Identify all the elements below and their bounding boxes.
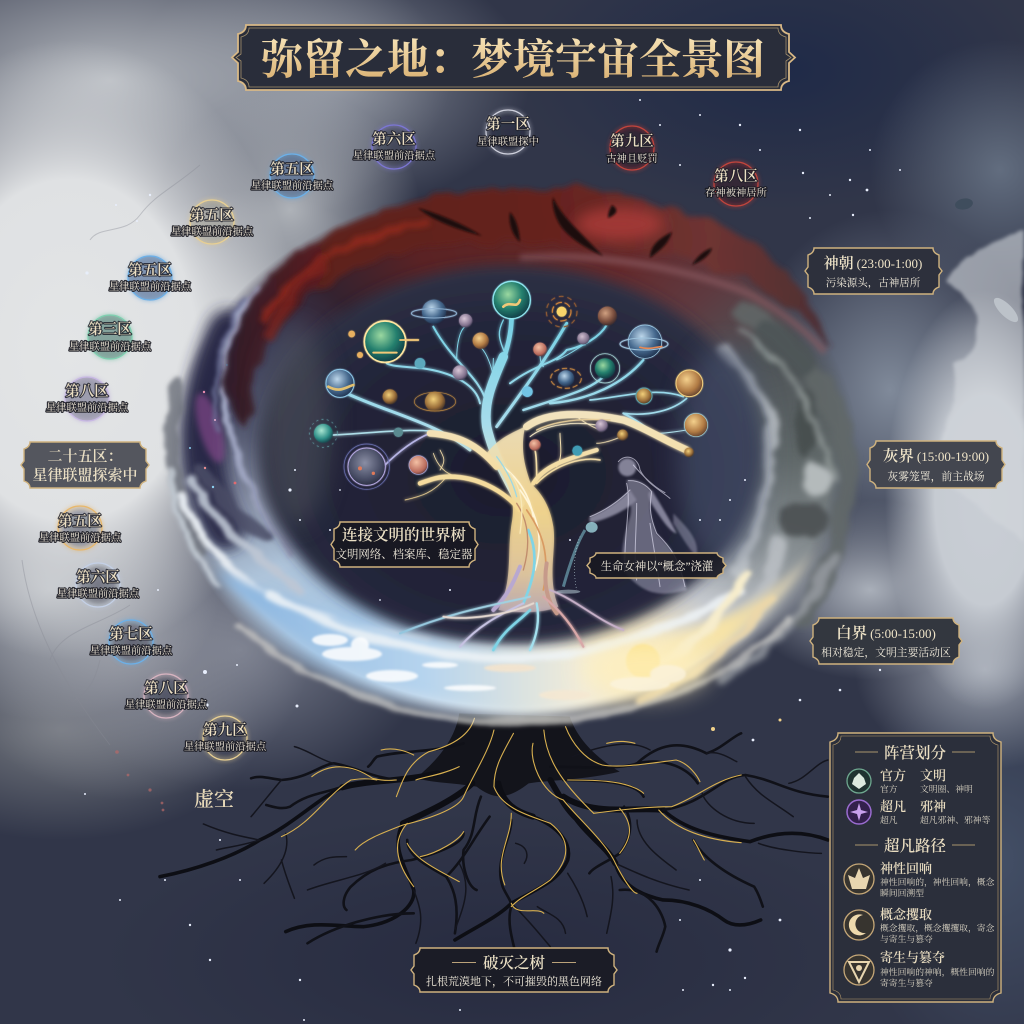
sun xyxy=(626,644,660,678)
icon: transcendent faction xyxy=(847,800,871,824)
zone marker xyxy=(69,315,152,359)
cracks in the band xyxy=(418,197,712,265)
planet xyxy=(533,343,547,356)
trunk strands xyxy=(493,419,610,613)
inner dark cosmos xyxy=(260,265,767,645)
ink wash: right light patch xyxy=(930,230,1024,540)
path: divine echo xyxy=(880,861,995,898)
zone marker xyxy=(353,125,436,169)
zone marker: 第六区 xyxy=(76,569,120,586)
zone marker: 第一区 xyxy=(486,116,530,133)
title banner: 弥留之地：梦境宇宙全景图 xyxy=(261,37,765,84)
zone marker xyxy=(109,256,192,300)
label: goddess of life: 生命女神以“概念”浇灌 xyxy=(601,559,713,573)
ring: crimson divine band xyxy=(224,189,832,430)
legend row: official: 文明圈、神明 xyxy=(920,783,973,794)
zone marker: 星律联盟前沿据点 xyxy=(57,587,140,600)
path: divine echo: 瞬间回溯型 xyxy=(880,887,924,898)
ring: dawn sky band with clouds xyxy=(215,550,815,722)
planet xyxy=(493,281,530,319)
path: concept seizing: 概念攫取 xyxy=(880,907,932,922)
root mass xyxy=(416,713,620,796)
spiral galaxy xyxy=(546,296,577,327)
legend row: official: 文明 xyxy=(920,768,946,783)
planet xyxy=(620,325,668,358)
trunk and branches: gold xyxy=(405,414,687,612)
branches: cyan xyxy=(333,313,688,503)
zone marker: 古神且贬罚 xyxy=(606,152,658,165)
planet xyxy=(409,456,428,474)
label: world tree xyxy=(331,522,478,567)
planet xyxy=(344,444,389,489)
legend row: official xyxy=(880,768,973,794)
icon: concept seizing xyxy=(844,910,874,940)
path: parasitism and usurping: 寄生与篡夺 xyxy=(880,950,945,965)
planet xyxy=(529,439,541,451)
zone marker: 第八区 xyxy=(65,383,109,400)
label: tree of destruction: 破灭之树 xyxy=(483,953,545,972)
zone marker: 星律联盟前沿据点 xyxy=(109,280,192,293)
legend row: official: 官方 xyxy=(880,783,898,794)
label: void: 虚空 xyxy=(194,788,234,811)
zone marker: 星律联盟前沿据点 xyxy=(353,149,436,162)
label: tree of destruction: 扎根荒漠地下，不可摧毁的黑色网络 xyxy=(426,974,602,988)
tree of destruction roots xyxy=(160,713,828,953)
heading: paths: 超凡路径 xyxy=(884,836,946,855)
zone marker: 第五区 xyxy=(128,262,172,279)
label: grey realm: 灰界(15:00-19:00) xyxy=(883,447,989,465)
label: world tree: 文明网络、档案库、稳定器 xyxy=(336,547,473,561)
zone marker: 星律联盟前沿据点 xyxy=(69,340,152,353)
heading: factions: 阵营划分 xyxy=(884,743,946,762)
planet xyxy=(411,300,457,324)
label: world tree: 连接文明的世界树 xyxy=(342,525,466,544)
planet xyxy=(598,307,617,325)
zone marker xyxy=(477,110,539,154)
world tree xyxy=(309,281,708,650)
label: divine dynasty xyxy=(805,248,942,294)
legend panel xyxy=(830,733,1001,1002)
tree base roots xyxy=(400,590,623,650)
path: concept seizing: 与寄生与篡夺 xyxy=(880,933,933,944)
planet xyxy=(326,369,354,397)
zone marker xyxy=(251,154,334,198)
planet xyxy=(636,388,652,404)
zone marker: 第三区 xyxy=(88,321,132,338)
label: white realm: 相对稳定，文明主要活动区 xyxy=(821,645,951,659)
planet xyxy=(522,386,533,397)
label: white realm xyxy=(810,618,962,664)
planet xyxy=(596,420,608,432)
zone marker xyxy=(171,200,254,244)
planet xyxy=(453,365,467,380)
zone marker: 第八区 xyxy=(714,168,758,185)
planets xyxy=(309,281,708,489)
planet xyxy=(684,413,708,437)
goddess hair strands and outline xyxy=(590,457,685,587)
zone marker: 星律联盟前沿据点 xyxy=(184,740,267,753)
embers xyxy=(115,750,164,811)
ring: deep space on left xyxy=(170,290,430,640)
planet xyxy=(383,389,397,404)
label: goddess of life xyxy=(587,553,726,578)
zone marker xyxy=(606,126,658,170)
planet xyxy=(572,446,582,456)
trunk body xyxy=(487,427,558,612)
zone marker: 第九区 xyxy=(203,722,247,739)
path: parasitism and usurping: 寄寄生与篡夺 xyxy=(880,977,933,988)
planet xyxy=(577,332,589,344)
zone marker: 第六区 xyxy=(372,131,416,148)
zone marker: 存神被神居所 xyxy=(705,186,767,199)
icon: parasitism and usurping xyxy=(844,955,874,985)
legend row: transcendent: 超凡 xyxy=(880,814,898,825)
path: concept seizing xyxy=(880,907,995,944)
zone marker xyxy=(57,563,140,607)
path: parasitism and usurping xyxy=(880,950,995,988)
icon: divine echo xyxy=(844,864,874,894)
zone marker: 星律联盟探中 xyxy=(477,135,539,148)
ring: day-night realm band xyxy=(175,205,842,727)
path: parasitism and usurping: 神性回响的神响，概性回响的 xyxy=(880,966,995,978)
label: grey realm: 灰雾笼罩，前主战场 xyxy=(887,469,985,483)
zone marker: 星律联盟前沿据点 xyxy=(251,179,334,192)
legend row: official: 官方 xyxy=(880,768,906,783)
planet xyxy=(676,370,703,397)
zone marker: 星律联盟前沿据点 xyxy=(125,698,208,711)
label: divine dynasty: 神朝(23:00-1:00) xyxy=(824,254,922,272)
zone marker xyxy=(125,674,208,718)
planet xyxy=(590,354,620,383)
planet xyxy=(415,358,425,369)
icon: official faction xyxy=(847,769,871,793)
zone marker: 星律联盟前沿据点 xyxy=(39,531,122,544)
path: divine echo: 神性回响的，神性回响，概念 xyxy=(880,876,995,888)
label: zone twenty-five: 二十五区： xyxy=(47,448,123,465)
label: zone twenty-five: 星律联盟探索中 xyxy=(32,466,138,484)
zone marker xyxy=(184,716,267,760)
zone marker xyxy=(705,162,767,206)
planet xyxy=(551,368,581,388)
planet xyxy=(348,321,418,362)
clouds xyxy=(312,634,686,700)
planet xyxy=(617,430,628,440)
planet xyxy=(684,448,694,457)
planet xyxy=(459,314,472,327)
path: concept seizing: 概念攫取，概念攫攫取，寄念 xyxy=(880,922,995,934)
zone marker: 第五区 xyxy=(58,513,102,530)
title banner xyxy=(232,25,795,90)
path: divine echo: 神性回响 xyxy=(880,861,932,876)
stars xyxy=(84,99,901,1021)
planet xyxy=(394,428,403,437)
label: zone twenty-five xyxy=(21,442,149,488)
zone marker: 第九区 xyxy=(610,133,654,150)
legend row: transcendent: 超凡邪神、邪神等 xyxy=(920,814,991,825)
label: tree of destruction xyxy=(411,948,617,992)
zone marker: 第八区 xyxy=(144,680,188,697)
zone marker: 星律联盟前沿据点 xyxy=(171,225,254,238)
ring: grey storm on right xyxy=(720,310,848,680)
zone marker: 星律联盟前沿据点 xyxy=(90,644,173,657)
zone marker: 第五区 xyxy=(270,161,314,178)
label: grey realm xyxy=(867,441,1005,488)
planet xyxy=(414,392,456,412)
zone marker: 星律联盟前沿据点 xyxy=(46,401,129,414)
zone marker xyxy=(46,377,129,421)
zone marker xyxy=(39,506,122,550)
zone marker: 第七区 xyxy=(109,626,153,643)
legend row: transcendent: 邪神 xyxy=(920,799,946,814)
planet xyxy=(473,333,489,349)
planet xyxy=(309,419,337,447)
label: white realm: 白界(5:00-15:00) xyxy=(836,624,936,642)
legend row: transcendent xyxy=(880,799,991,825)
gold veins xyxy=(281,718,741,913)
zone marker xyxy=(90,620,173,664)
label: divine dynasty: 污染源头，古神居所 xyxy=(826,276,921,289)
goddess of life pouring concepts xyxy=(556,457,697,594)
zone marker: 第五区 xyxy=(190,207,234,224)
legend row: transcendent: 超凡 xyxy=(880,799,906,814)
